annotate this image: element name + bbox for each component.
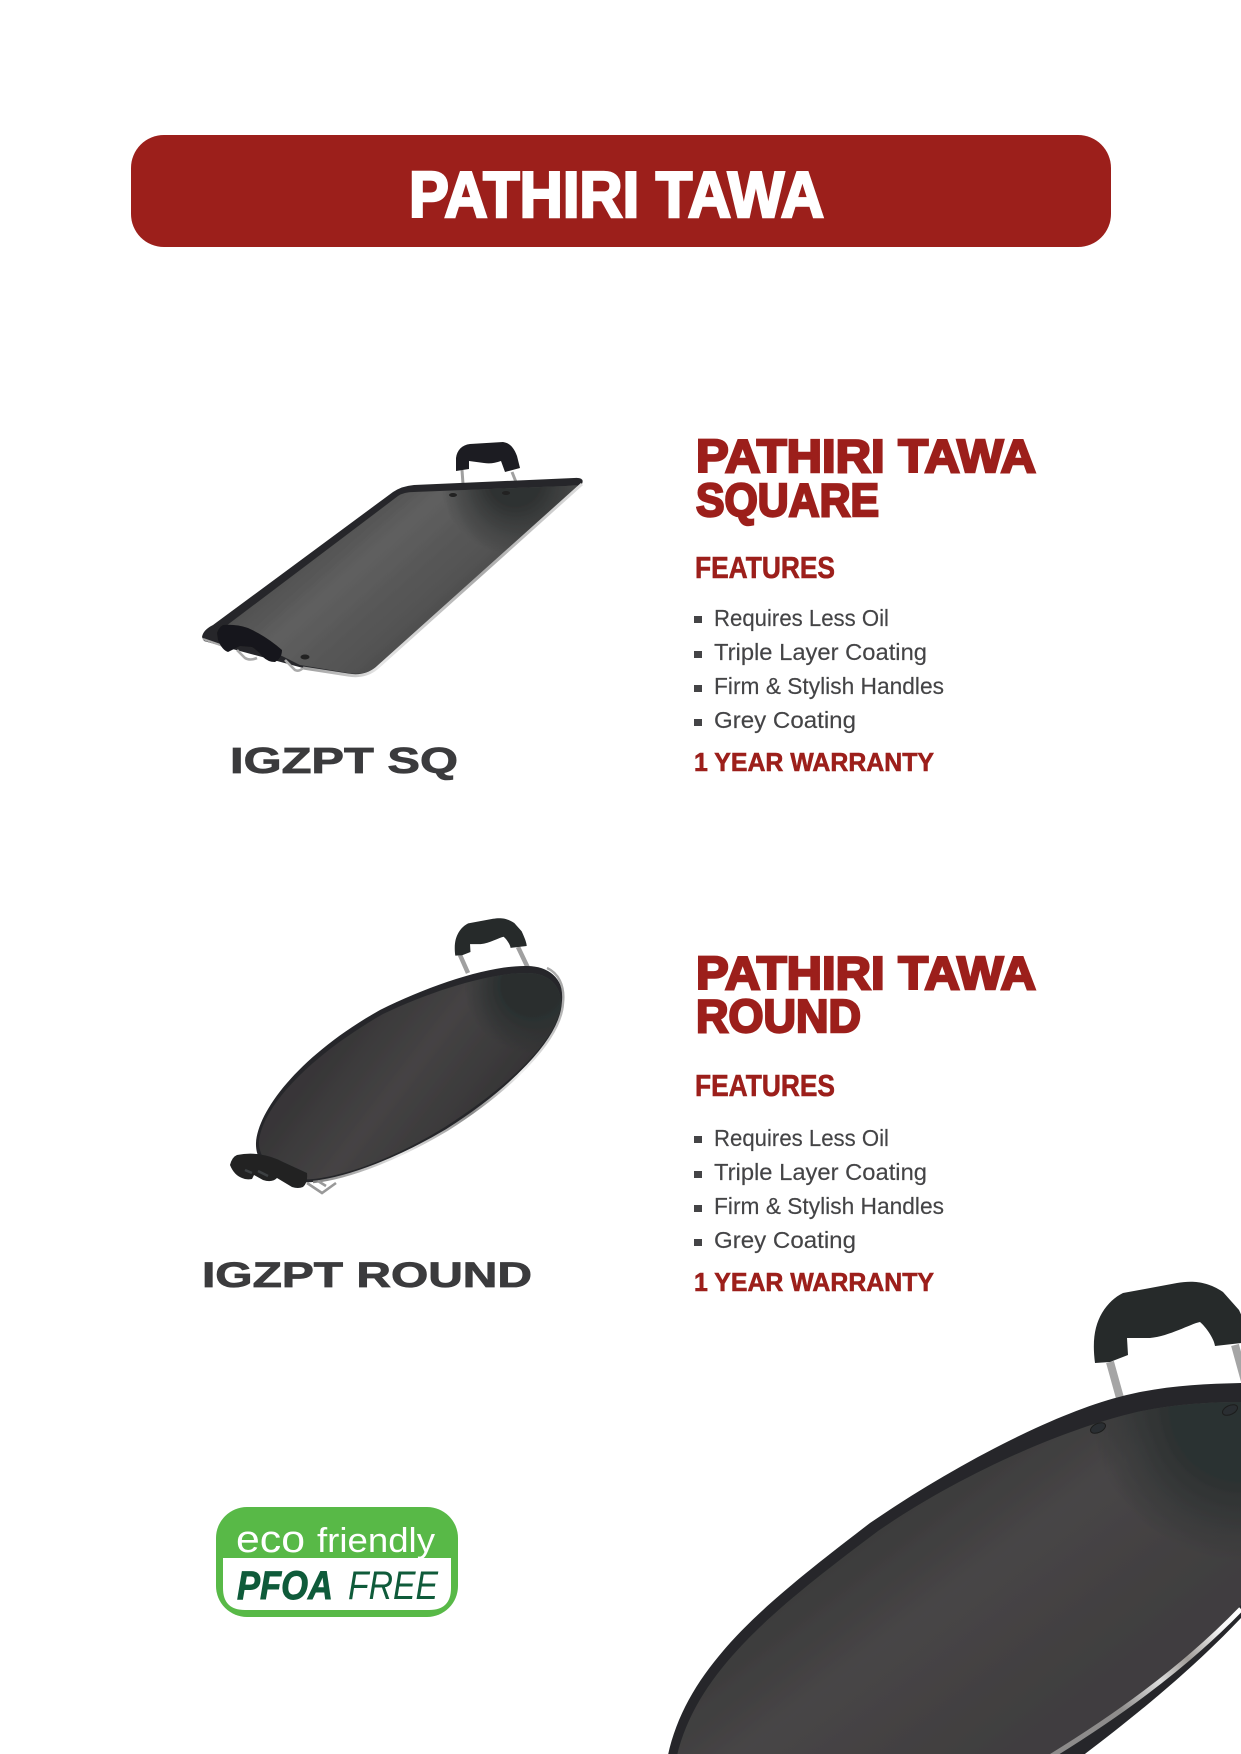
feature list: Grey Coating <box>714 1227 856 1253</box>
feature list: Triple Layer Coating <box>714 639 927 665</box>
large decorative round tawa <box>667 1282 1241 1754</box>
heading: pathiri tawa round: ROUND <box>696 990 861 1042</box>
badge: eco friendly PFOA free: eco <box>236 1519 305 1561</box>
product image: round tawa <box>230 918 563 1193</box>
feature list: Grey Coating <box>714 707 856 733</box>
product image: square tawa <box>202 442 583 676</box>
features heading: FEATURES <box>695 1069 835 1103</box>
feature list: Requires Less Oil <box>714 605 889 631</box>
feature list: Triple Layer Coating <box>714 1159 927 1185</box>
features heading: FEATURES <box>695 551 835 585</box>
feature list <box>694 1125 944 1253</box>
heading: pathiri tawa round <box>696 947 1036 1042</box>
heading: pathiri tawa round: PATHIRI TAWA <box>696 947 1036 999</box>
feature list: Firm & Stylish Handles <box>714 673 944 699</box>
badge: eco friendly PFOA free: PFOA <box>237 1564 333 1608</box>
title banner <box>131 135 1111 247</box>
heading: pathiri tawa square <box>696 430 1036 526</box>
warranty: 1 YEAR WARRANTY <box>694 1267 934 1297</box>
badge: eco friendly PFOA free: friendly <box>317 1522 435 1560</box>
badge: eco friendly PFOA free: FREE <box>348 1564 439 1608</box>
product details: round <box>694 947 1036 1297</box>
warranty: 1 YEAR WARRANTY <box>694 747 934 777</box>
heading: pathiri tawa square: SQUARE <box>696 474 879 526</box>
feature list: Firm & Stylish Handles <box>714 1193 944 1219</box>
feature list: Requires Less Oil <box>714 1125 889 1151</box>
feature list <box>694 605 944 733</box>
model label: IGZPT ROUND: IGZPT ROUND <box>202 1256 532 1295</box>
model label: IGZPT SQ: IGZPT SQ <box>230 740 458 781</box>
heading: pathiri tawa square: PATHIRI TAWA <box>696 430 1036 482</box>
title: PATHIRI TAWA <box>409 158 824 231</box>
product details: square <box>694 430 1036 777</box>
badge: eco friendly PFOA free <box>216 1507 458 1617</box>
